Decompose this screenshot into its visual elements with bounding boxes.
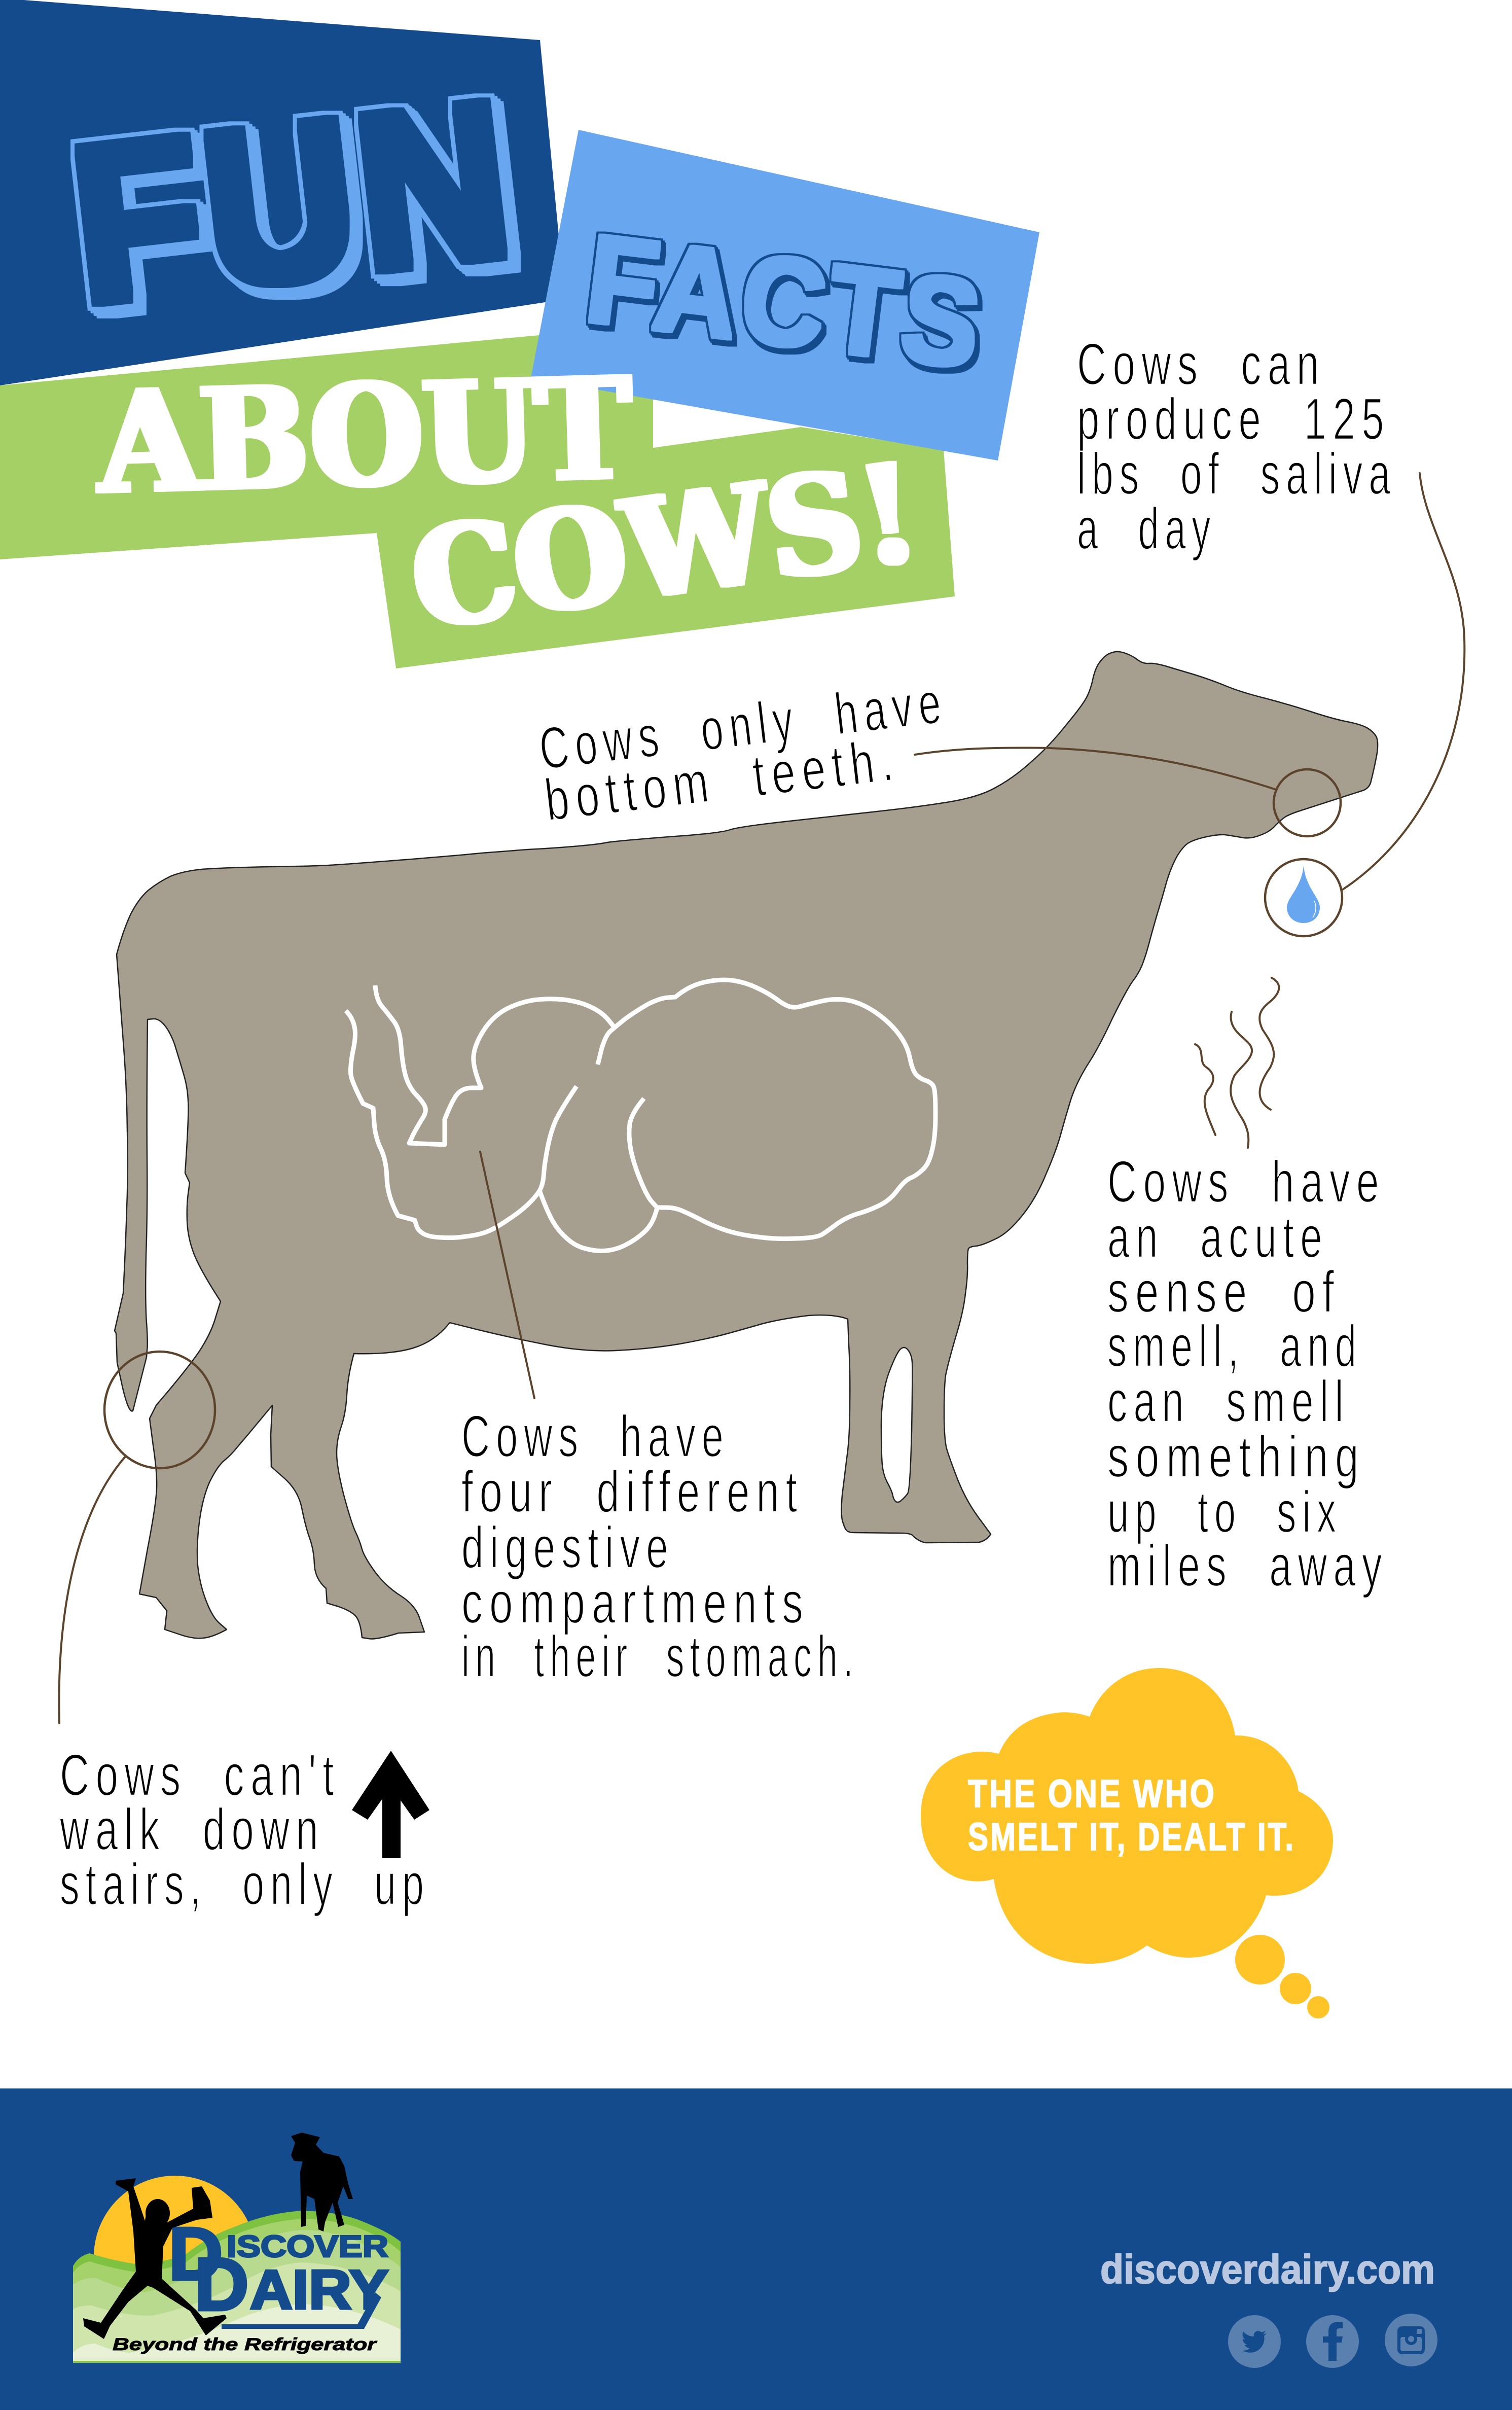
cloud shape	[921, 1668, 1333, 1964]
cloud trail bubbles	[1235, 1935, 1329, 2018]
logo child silhouette	[83, 2178, 227, 2339]
leader line: teeth	[915, 748, 1275, 789]
logo: Discover Dairy	[73, 2133, 401, 2363]
callout: bottom teeth	[536, 668, 1341, 836]
cloud text	[968, 1772, 1295, 1859]
logo wordmark: D	[194, 2243, 249, 2326]
icon: smell lines	[1195, 978, 1279, 1148]
text: smell fact: an acute	[1107, 1204, 1328, 1270]
leader line: stomach	[480, 1152, 534, 1398]
text: teeth fact: Cows only have	[536, 668, 950, 782]
icon: twitter	[1228, 2315, 1281, 2368]
leader line: stairs	[59, 1456, 126, 1723]
illustration: stomach compartments	[346, 980, 935, 1251]
text: saliva fact: a day	[1077, 495, 1216, 561]
cloud text: SMELT IT, DEALT IT.	[968, 1815, 1295, 1859]
text: teeth fact: bottom teeth.	[542, 726, 903, 833]
text: stairs fact	[59, 1742, 430, 1917]
text: stairs fact: stairs, only up	[60, 1851, 430, 1917]
icon: water drop	[1287, 866, 1320, 923]
logo sun	[94, 2176, 256, 2338]
text: smell fact: something	[1107, 1424, 1365, 1490]
text: smell fact: can smell	[1107, 1368, 1350, 1434]
logo wordmark: D	[168, 2212, 223, 2296]
callout: thought bubble	[921, 1668, 1333, 2018]
text: smell fact: up to six	[1107, 1479, 1342, 1545]
callout: sense of smell	[1107, 978, 1388, 1599]
website url: discoverdairy.com	[1100, 2247, 1435, 2292]
illustration: cow silhouette	[115, 652, 1378, 1639]
logo wordmark: AIRY	[250, 2259, 388, 2321]
panel: footer	[0, 2088, 1512, 2410]
logo cow silhouette	[291, 2133, 353, 2231]
text: stomach fact: four different	[461, 1459, 804, 1525]
cloud text: THE ONE WHO	[968, 1772, 1216, 1816]
icon: up arrow	[352, 1751, 429, 1858]
logo tagline: Beyond the Refrigerator	[113, 2335, 377, 2354]
title: ABOUT: ABOUT	[95, 346, 633, 525]
text: saliva fact: Cows can	[1077, 331, 1325, 397]
icon: facebook	[1306, 2315, 1359, 2368]
text: stomach fact: Cows have	[461, 1403, 730, 1469]
text: stomach fact: digestive	[461, 1514, 674, 1580]
logo hills	[73, 2211, 401, 2363]
text: saliva fact	[1077, 331, 1396, 561]
title: FACTS: FACTS	[580, 208, 992, 395]
callout: saliva	[1077, 331, 1464, 936]
callout: stairs	[59, 1352, 430, 1917]
icon: instagram	[1385, 2314, 1437, 2366]
circle: mouth	[1274, 769, 1341, 836]
text: stomach fact: compartments	[461, 1570, 810, 1636]
text: teeth fact	[536, 668, 950, 833]
circle: saliva	[1265, 859, 1342, 936]
banner: dark blue	[0, 0, 565, 385]
text: smell fact	[1107, 1149, 1388, 1599]
banner: green	[0, 325, 955, 668]
panel: title banners	[0, 0, 1039, 668]
text: smell fact: miles away	[1107, 1533, 1388, 1599]
logo wordmark	[168, 2212, 388, 2329]
leader line: saliva	[1343, 473, 1464, 890]
text: smell fact: sense of	[1107, 1259, 1341, 1325]
title: FUN: FUN	[61, 54, 526, 349]
callout: digestive compartments	[461, 1152, 859, 1689]
circle: hind leg	[104, 1352, 215, 1468]
title: COWS!: COWS!	[403, 432, 927, 661]
logo wordmark: ISCOVER	[227, 2229, 388, 2263]
banner: light blue	[531, 130, 1039, 460]
footer background	[0, 2088, 1512, 2410]
text: stairs fact: walk down	[59, 1796, 325, 1862]
text: stomach fact	[461, 1403, 859, 1689]
text: stomach fact: in their stomach.	[461, 1623, 859, 1689]
text: smell fact: Cows have	[1107, 1149, 1385, 1215]
text: stairs fact: Cows can't	[60, 1742, 340, 1808]
text: smell fact: smell, and	[1107, 1313, 1362, 1379]
